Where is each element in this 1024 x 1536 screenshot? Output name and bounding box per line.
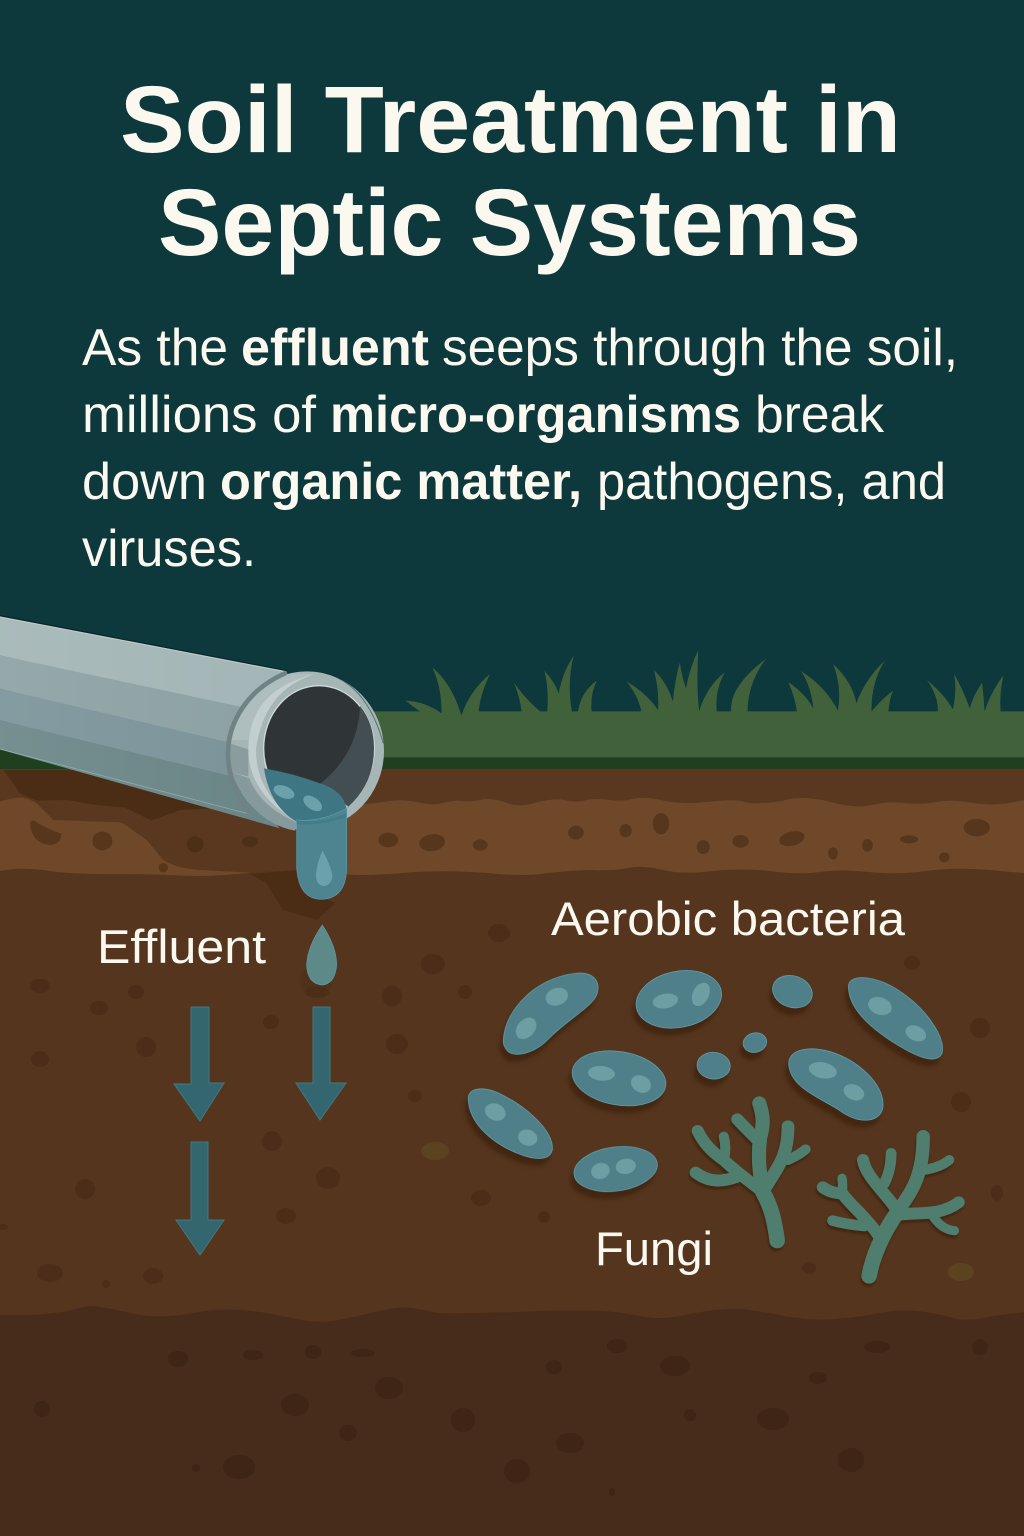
sky background: [0, 0, 1024, 772]
upper soil layer: [0, 770, 1024, 880]
deep soil layer: [0, 1306, 1024, 1536]
specks in middle soil: [0, 924, 1003, 1288]
pipe: [0, 616, 384, 899]
shadow below outflow: [250, 870, 335, 920]
intro paragraph: effluent: [241, 319, 429, 377]
intro paragraph: viruses.: [82, 520, 256, 578]
fungi: [696, 1103, 959, 1276]
pipe body: [0, 616, 287, 828]
downward arrows: [174, 1007, 346, 1255]
intro paragraph: millions of: [82, 386, 317, 444]
middle soil layer: [0, 867, 1024, 1330]
grass: [216, 650, 1024, 770]
arrow 2: [296, 1007, 346, 1120]
title: Septic Systems: [158, 170, 861, 276]
label: Effluent: Effluent: [97, 920, 266, 973]
specks in deep soil: [34, 1339, 988, 1496]
intro paragraph: break: [755, 386, 885, 444]
light topsoil band: [300, 798, 1024, 880]
title: Soil Treatment in: [120, 67, 901, 173]
fungus 2: [823, 1137, 959, 1276]
pipe collar: [228, 671, 384, 831]
aerobic bacteria cluster: [468, 963, 942, 1197]
left topsoil patch and under-pipe shadow: [0, 770, 253, 883]
intro paragraph: down: [82, 453, 207, 511]
water flowing from pipe: [264, 768, 347, 899]
intro paragraph: micro-organisms: [330, 386, 741, 444]
label: Fungi: Fungi: [595, 1222, 713, 1275]
soil layers: [0, 769, 1024, 1536]
intro paragraph: seeps through the soil,: [442, 319, 958, 377]
fungus 1: [696, 1103, 806, 1241]
pipe opening: [264, 686, 374, 811]
intro paragraph: As the: [82, 319, 228, 377]
pebbles in topsoil: [378, 813, 990, 862]
intro paragraph: [82, 319, 958, 578]
pebbles left of pipe outlet: [30, 820, 258, 872]
grass strip left of pipe: [0, 745, 120, 770]
intro paragraph: pathogens, and: [597, 453, 946, 511]
arrow 1: [174, 1007, 224, 1121]
arrow 3: [176, 1142, 224, 1255]
title: [120, 67, 901, 276]
intro paragraph: organic matter,: [220, 453, 582, 511]
label: Aerobic bacteria: Aerobic bacteria: [551, 892, 906, 945]
effluent drop: [300, 925, 337, 997]
